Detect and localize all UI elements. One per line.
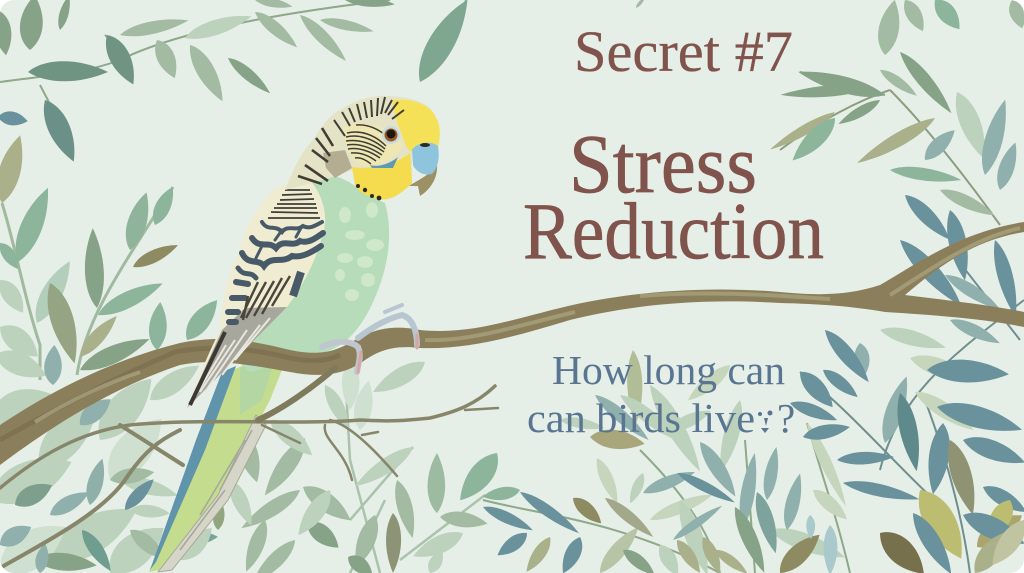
budgie feet	[322, 305, 417, 372]
main heading: Stress	[569, 118, 757, 211]
foliage: pale leaves behind the question	[559, 350, 748, 506]
foliage: bottom left sprig	[0, 357, 338, 573]
main heading	[523, 118, 824, 276]
foliage: lower centre pale sprig	[298, 355, 521, 573]
foliage: right blue-green sprig	[788, 189, 1024, 573]
budgie breast mottling	[335, 202, 384, 301]
foliage: top left sprig	[0, 0, 395, 166]
budgie body	[225, 175, 389, 372]
question text	[527, 347, 795, 441]
stray glyph mark	[758, 410, 772, 433]
budgie head	[285, 96, 440, 200]
foliage: top right sprig	[768, 0, 1024, 225]
foliage: left sprig	[0, 132, 224, 385]
budgie tail	[149, 345, 292, 572]
main heading: Reduction	[523, 186, 824, 276]
budgie wing	[187, 177, 325, 408]
foliage: top centre leaf	[408, 0, 646, 88]
small heading: Secret #7: Secret #7	[574, 19, 793, 84]
question text: ?	[777, 395, 795, 441]
question text: How long can	[552, 347, 785, 393]
foliage: bottom centre sprig	[481, 420, 852, 573]
question text: can birds live	[527, 395, 755, 441]
thin lower branches	[0, 368, 498, 568]
main branch	[0, 222, 1024, 465]
